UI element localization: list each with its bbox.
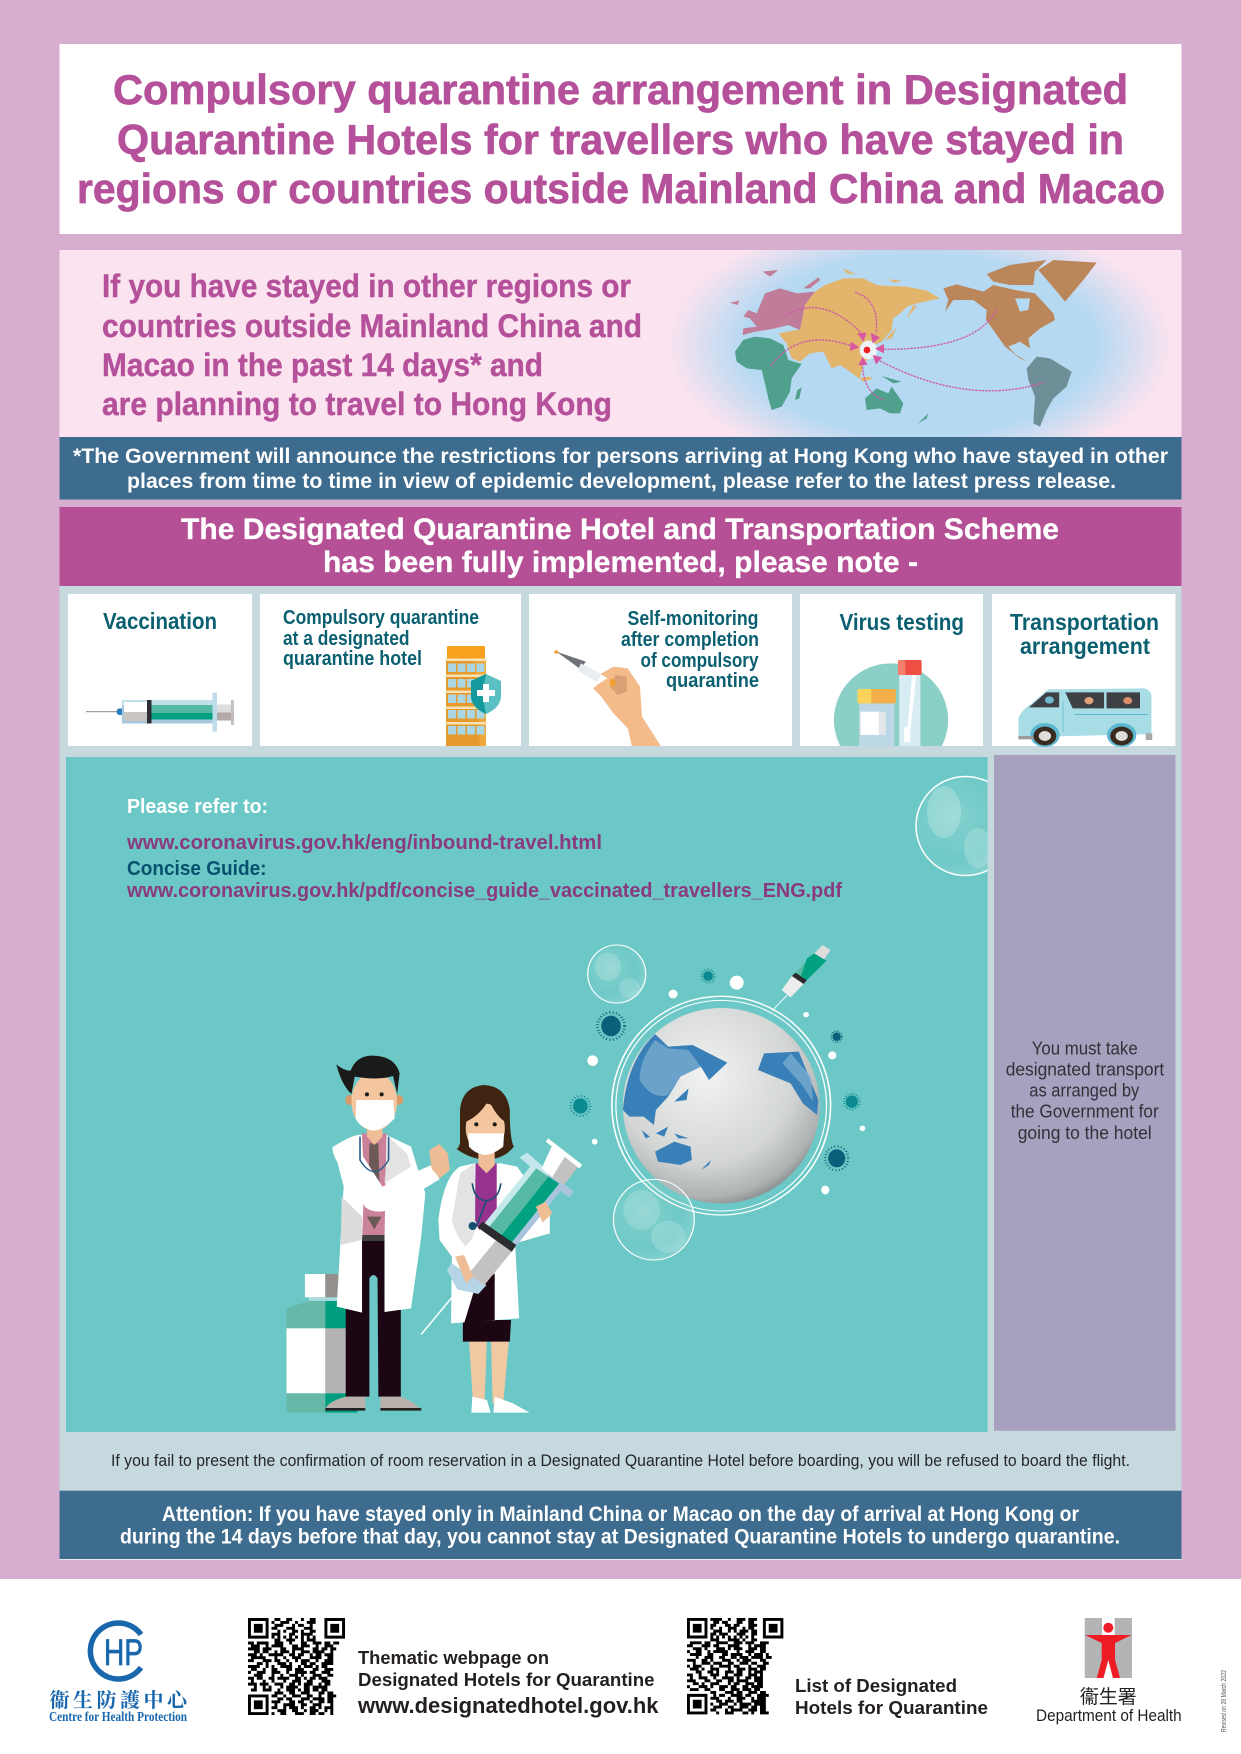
panel: transport note: as arranged by [1029, 1081, 1139, 1101]
text block: please refer to: Please refer to: [127, 796, 268, 818]
icon: hotel with shield [445, 646, 501, 746]
logo: Centre for Health Protection [49, 1623, 190, 1725]
panel: transport note [994, 755, 1176, 1431]
panel: teal information and illustration [66, 757, 1015, 1432]
illustration: globe, doctors and vaccine [287, 945, 865, 1413]
card: virus testing: Virus testing [840, 609, 964, 635]
logo: Centre for Health Protection: 衞生防護中心 [50, 1684, 190, 1713]
heading: main title: Compulsory quarantine arrangement in Designated [113, 66, 1128, 113]
notice bar: attention: during the 14 days before that day, you cannot stay at Designated Quarantine Hotels to undergo quarantine. [120, 1524, 1120, 1548]
card: compulsory quarantine hotel: Compulsory quarantine [283, 607, 479, 629]
vaccine bottle [287, 1274, 358, 1413]
card: self-monitoring: after completion [621, 629, 759, 651]
text block: list of hotels: Hotels for Quarantine [795, 1698, 988, 1718]
card: compulsory quarantine hotel: quarantine hotel [283, 648, 422, 670]
large syringe held by woman [421, 1138, 582, 1334]
world map with arrows to Hong Kong [677, 250, 1163, 437]
card: self-monitoring: quarantine [666, 670, 759, 692]
icon: hand holding thermometer [554, 650, 661, 746]
panel: scheme details background [60, 586, 1182, 1491]
logo: Department of Health [1036, 1618, 1182, 1725]
text block: list of hotels [795, 1676, 988, 1718]
card: compulsory quarantine hotel: at a designated [283, 628, 410, 650]
notice bar: attention: Attention: If you have stayed only in Mainland China or Macao on the day of arrival at Hong Kong or [162, 1502, 1080, 1526]
text block: please refer to: www.coronavirus.gov.hk/eng/inbound-travel.html [126, 832, 602, 854]
text block: eligibility statement: are planning to travel to Hong Kong [102, 386, 612, 422]
heading bar: scheme: has been fully implemented, please note - [323, 546, 918, 579]
QR code: thematic webpage [248, 1619, 344, 1714]
card: vaccination [68, 594, 252, 746]
logo: Centre for Health Protection: Centre for Health Protection [49, 1710, 187, 1725]
text block: thematic webpage: www.designatedhotel.gov.hk [357, 1693, 659, 1718]
bubble bottom [613, 1179, 694, 1260]
notice bar: government restrictions: places from time to time in view of epidemic development, please refer to the latest press release. [127, 469, 1116, 493]
globe [612, 996, 831, 1215]
text block: thematic webpage: Thematic webpage on [358, 1648, 549, 1668]
card: transportation arrangement: arrangement [1020, 633, 1150, 659]
panel: who this applies to [60, 250, 1182, 437]
panel: transport note: You must take [1032, 1038, 1138, 1058]
text block: boarding warning: If you fail to present the confirmation of room reservation in a Designated Quarantine Hotel before boarding, you will be refused to board the flight. [111, 1452, 1130, 1470]
icon: van [1018, 688, 1152, 747]
logo: Department of Health: Department of Health [1036, 1706, 1182, 1725]
text block: eligibility statement [102, 268, 642, 422]
heading bar: scheme [60, 507, 1182, 586]
white particles [587, 976, 865, 1194]
panel: transport note: designated transport [1006, 1060, 1164, 1080]
panel: transport note: going to the hotel [1018, 1123, 1152, 1143]
icon: corner bubble [915, 776, 988, 876]
card: compulsory quarantine hotel [260, 594, 521, 746]
text block: eligibility statement: Macao in the past 14 days* and [102, 347, 543, 383]
logo: Department of Health: 衞生署 [1080, 1686, 1137, 1708]
doctor: man [325, 1056, 450, 1411]
QR code: list of hotels [687, 1619, 782, 1713]
text block: thematic webpage: Designated Hotels for Quarantine [358, 1670, 654, 1690]
heading: main title: Quarantine Hotels for travellers who have stayed in [117, 116, 1124, 163]
text block: thematic webpage [357, 1648, 659, 1718]
viruses [571, 969, 860, 1170]
card: self-monitoring: of compulsory [640, 650, 759, 672]
card: vaccination: Vaccination [103, 608, 217, 634]
icon: syringe [86, 693, 234, 732]
notice bar: attention [60, 1491, 1182, 1560]
bubble top [588, 945, 646, 1003]
doctor: woman [438, 1085, 550, 1413]
card: virus testing [800, 594, 983, 746]
card: self-monitoring [529, 594, 792, 746]
text block: please refer to: Concise Guide: [127, 858, 266, 880]
card: self-monitoring: Self-monitoring [628, 608, 758, 630]
text block: eligibility statement: If you have stayed in other regions or [102, 268, 631, 304]
revision date: Revised on 28 March 2022 [1221, 1670, 1228, 1732]
panel: transport note: the Government for [1011, 1102, 1159, 1122]
text block: please refer to: www.coronavirus.gov.hk/pdf/concise_guide_vaccinated_travellers_ENG.pdf [126, 880, 842, 902]
notice bar: government restrictions [60, 437, 1182, 500]
heading: main title [77, 66, 1165, 212]
text block: eligibility statement: countries outside Mainland China and [102, 308, 642, 344]
notice bar: government restrictions: *The Government will announce the restrictions for persons arriving at Hong Kong who have stayed in other [73, 444, 1169, 468]
logo: Centre for Health Protection: HP [104, 1632, 143, 1673]
card: transportation arrangement: Transportation [1010, 609, 1159, 635]
panel: title [60, 44, 1182, 234]
card: transportation arrangement [992, 594, 1176, 747]
heading: main title: regions or countries outside Mainland China and Macao [77, 165, 1165, 212]
text block: please refer to [126, 796, 842, 902]
text block: list of hotels: List of Designated [795, 1676, 957, 1696]
small syringe [772, 945, 831, 1011]
icon: sample bottle and swab tube [834, 660, 948, 746]
heading bar: scheme: The Designated Quarantine Hotel and Transportation Scheme [181, 513, 1059, 546]
